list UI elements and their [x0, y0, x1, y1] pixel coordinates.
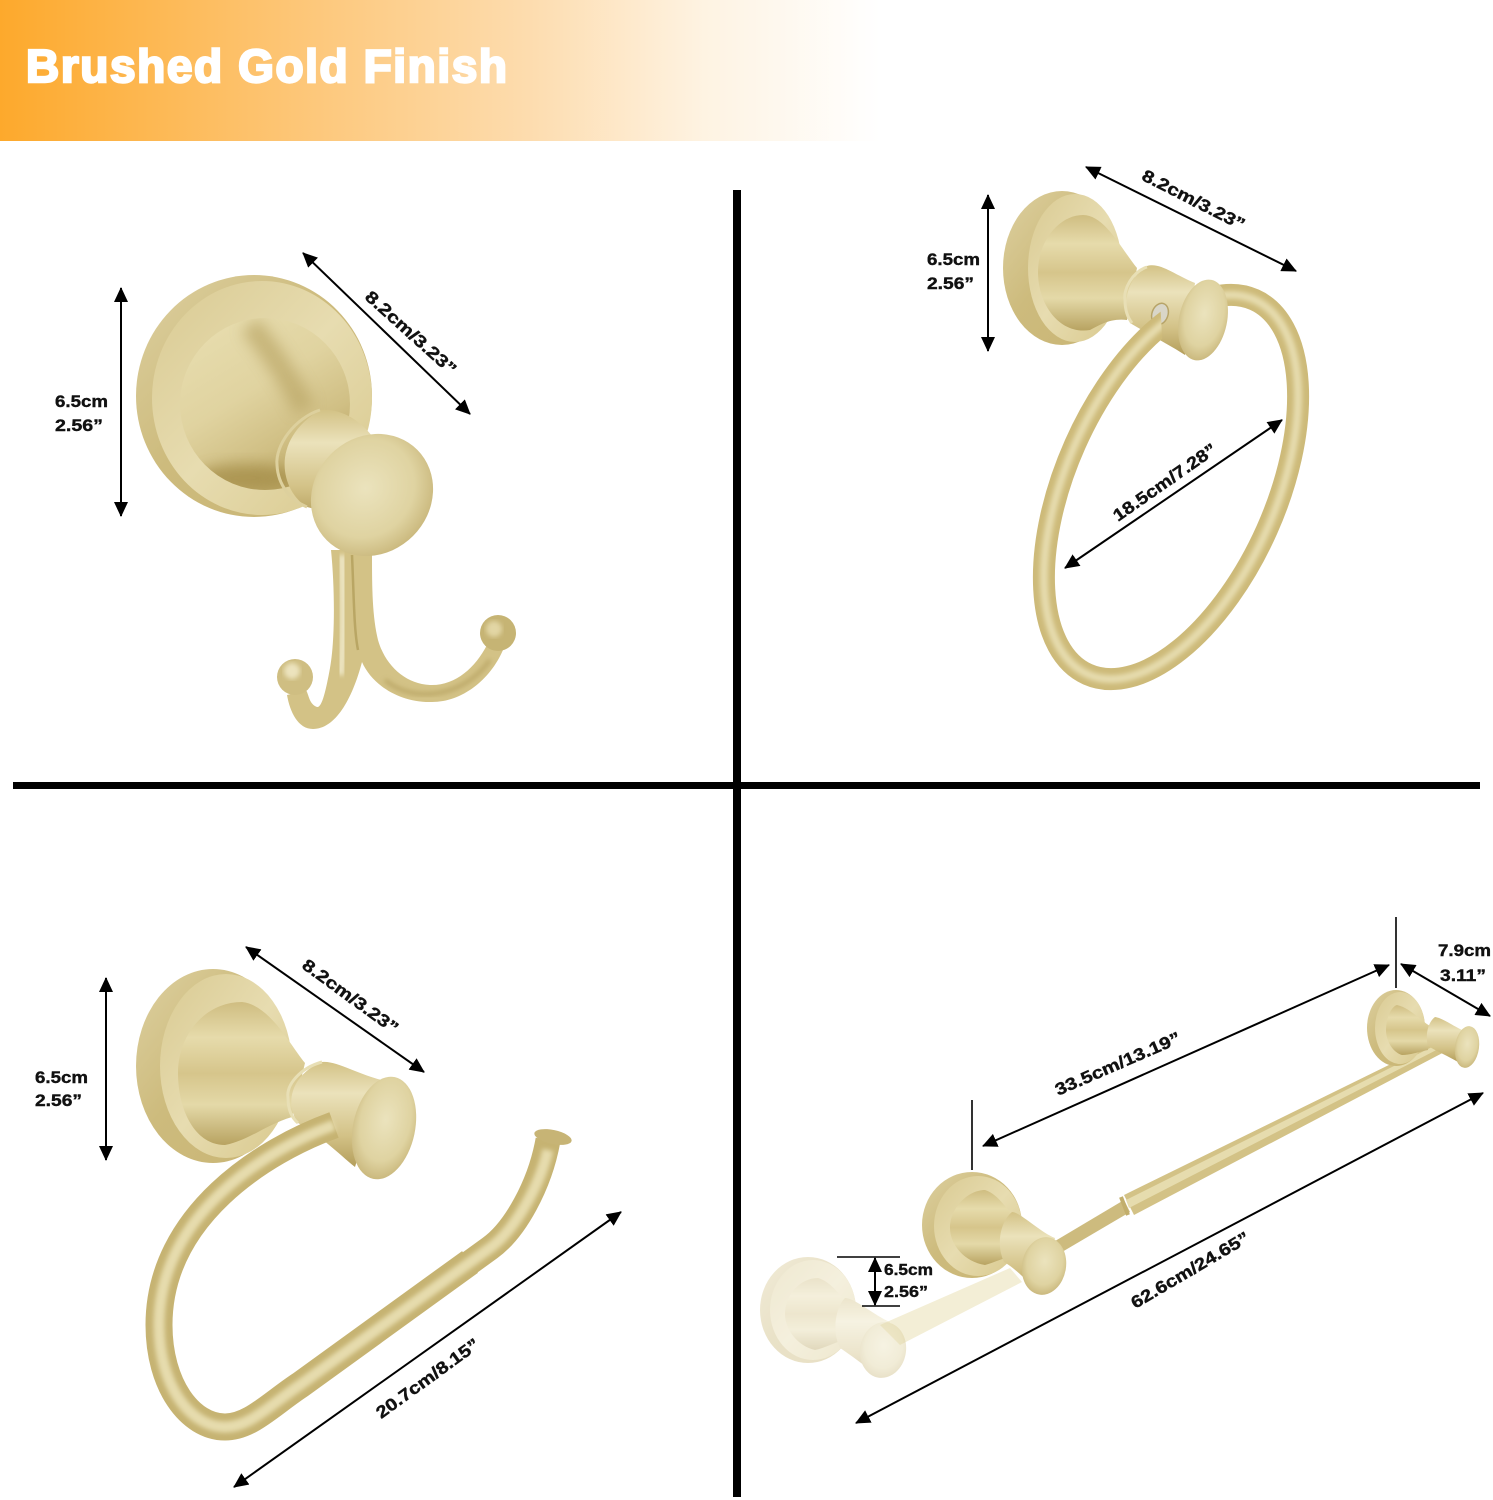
dimension: post spacing — [972, 917, 1396, 1170]
title: Brushed Gold Finish — [26, 40, 507, 92]
towel ring product — [1003, 191, 1310, 690]
vertical divider — [733, 190, 741, 1497]
header banner — [0, 0, 880, 141]
dimension: depth: 8.2cm/3.23” — [1139, 166, 1248, 234]
dimension: height: 2.56” — [55, 416, 103, 435]
dimension: height: 2.56” — [927, 274, 974, 293]
dimension: ring diameter: 18.5cm/7.28” — [1109, 440, 1220, 525]
dimension: height — [927, 195, 988, 351]
panel: towel ring — [927, 166, 1310, 690]
dimension: bar depth: 7.9cm — [1438, 941, 1491, 960]
panel: towel bar — [760, 917, 1491, 1423]
dimension: bar length — [856, 1093, 1483, 1423]
panel: robe hook — [55, 253, 516, 729]
panel: toilet paper holder — [35, 947, 621, 1487]
dimension: post spacing: 33.5cm/13.19” — [1052, 1028, 1183, 1100]
dimension: bracket height: 2.56” — [884, 1284, 928, 1301]
dimension: bar depth — [1401, 941, 1491, 1016]
paper holder product — [136, 969, 573, 1427]
dimension: height: 2.56” — [35, 1091, 82, 1110]
dimension: height: 6.5cm — [55, 392, 108, 411]
dimension: bar depth: 3.11” — [1440, 966, 1486, 985]
dimension: height — [55, 288, 121, 516]
dimension: depth — [246, 947, 424, 1072]
dimension: height: 6.5cm — [927, 250, 980, 269]
dimension: height: 6.5cm — [35, 1068, 88, 1087]
towel bar product — [760, 990, 1482, 1382]
dimension: bracket height — [837, 1257, 933, 1306]
dimension: depth: 8.2cm/3.23” — [299, 955, 402, 1038]
dimension: depth: 8.2cm/3.23” — [361, 287, 460, 379]
dimension: holder length — [234, 1212, 621, 1487]
dimension: holder length: 20.7cm/8.15” — [372, 1335, 483, 1422]
horizontal divider — [13, 782, 1480, 789]
dimension: bracket height: 6.5cm — [884, 1262, 933, 1279]
dimension: depth — [1086, 166, 1296, 271]
dimension: height — [35, 978, 106, 1160]
hook product — [136, 275, 516, 729]
dimension: depth — [303, 253, 470, 414]
dimension: ring diameter — [1065, 420, 1282, 568]
dimension: bar length: 62.6cm/24.65” — [1128, 1228, 1253, 1312]
